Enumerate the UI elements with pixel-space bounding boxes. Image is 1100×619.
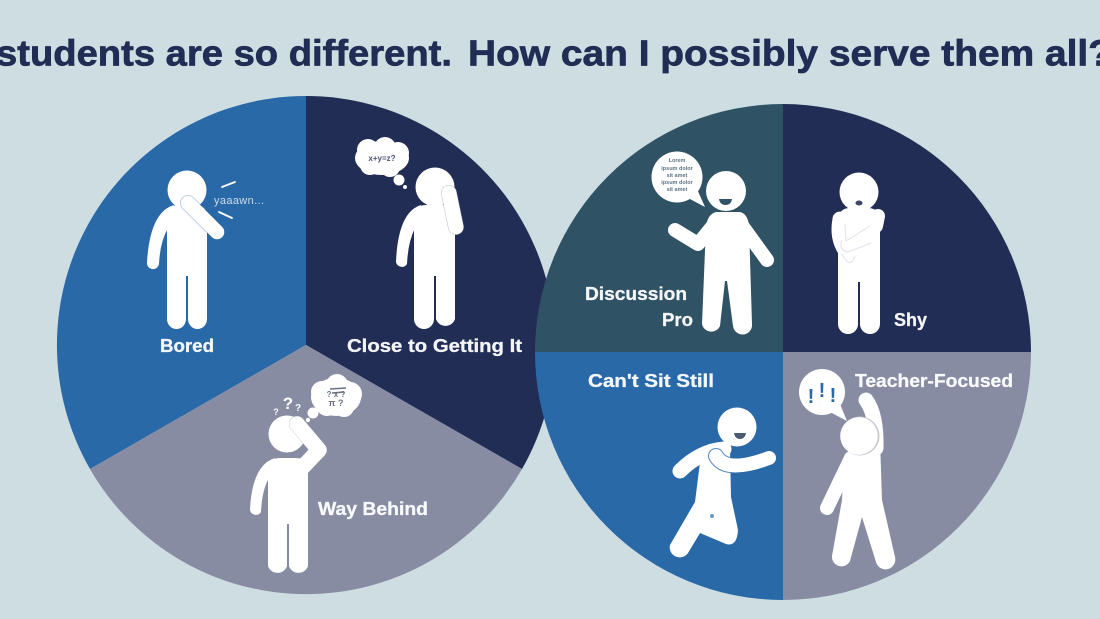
figure: bored student yawning: [147, 170, 264, 329]
icon: speech bubble with lorem ipsum: ipsum dolor: [661, 180, 694, 186]
icon: thought cloud: x+y=z?: [368, 154, 396, 163]
icon: question marks: [273, 394, 301, 417]
icon: mouth: [856, 200, 862, 206]
icon: question marks: ?: [283, 394, 293, 413]
quadrant: teacher-focused: [783, 352, 1031, 600]
label: shy: Shy: [894, 310, 927, 330]
icon: speech bubble with lorem ipsum: [652, 152, 705, 207]
icon: speech bubble with exclamation marks: !: [819, 380, 825, 402]
label: discussion pro: [585, 284, 693, 330]
quadrant: discussion pro: [535, 104, 783, 352]
label: teacher-focused: Teacher-Focused: [855, 371, 1013, 391]
title: How can I possibly serve them all?: [468, 32, 1100, 74]
icon: confused thought cloud: π ?: [329, 398, 343, 408]
figure: shy student: [838, 172, 880, 334]
icon: speech bubble with lorem ipsum: sit amet: [667, 187, 688, 193]
wedge: close to getting it: [306, 96, 555, 469]
icon: mouth: [734, 433, 746, 439]
quadrant: shy: [783, 104, 1031, 352]
label: way behind: Way Behind: [318, 499, 428, 519]
panel: left pie, three student types: [57, 96, 555, 594]
icon: speech bubble with lorem ipsum: Lorem: [669, 158, 686, 164]
wedge: bored: [57, 96, 306, 469]
title: [0, 32, 1100, 74]
icon: speech bubble with exclamation marks: [799, 369, 847, 421]
figure: restless student running: [670, 408, 769, 557]
wedge: way behind: [90, 345, 522, 594]
label: discussion pro: Pro: [662, 310, 693, 330]
panel: right pie, four student types: [535, 104, 1031, 600]
icon: thought cloud: [355, 137, 409, 189]
label: discussion pro: Discussion: [585, 284, 687, 304]
figure: student way behind: [250, 374, 362, 573]
icon: confused thought cloud: ? x ?: [327, 390, 345, 399]
icon: speech bubble with exclamation marks: !: [830, 385, 836, 407]
figure: bored student yawning: yaaawn...: [214, 195, 264, 207]
icon: question marks: ?: [295, 403, 301, 414]
icon: confused thought cloud: [306, 374, 362, 422]
label: bored: Bored: [160, 336, 214, 356]
figure: discussion pro talking: [652, 152, 767, 335]
figure: teacher-focused student raising hand: [799, 369, 895, 569]
label: can't sit still: Can't Sit Still: [588, 371, 714, 391]
icon: question marks: ?: [273, 407, 279, 417]
icon: speech bubble with lorem ipsum: sit amet: [667, 173, 688, 179]
figure: student close to getting it: [355, 137, 456, 329]
icon: mouth: [719, 199, 732, 205]
label: close to getting it: Close to Getting It: [347, 336, 522, 356]
icon: speech bubble with exclamation marks: !: [808, 386, 814, 408]
quadrant: can't sit still: [535, 352, 783, 600]
title: students are so different.: [0, 32, 452, 74]
icon: speech bubble with lorem ipsum: ipsum dolor: [661, 166, 694, 172]
